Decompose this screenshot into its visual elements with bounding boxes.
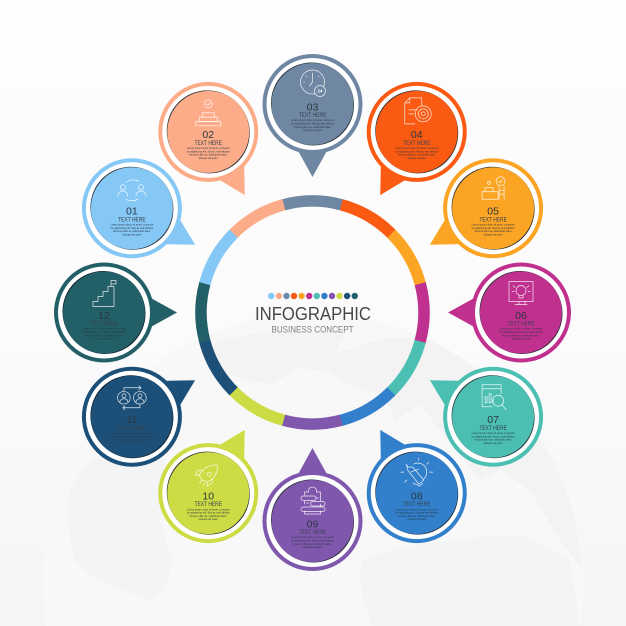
callout 01: rhoncus diam at, sollicitudin diam. — [113, 229, 151, 233]
callout 05: Lorem ipsum dolor sit amet, consecte — [472, 222, 515, 226]
callout 03: tur adipiscing elit. Sed ac erat efficitur — [291, 122, 334, 126]
callout 06: Quisque elit quam — [512, 336, 531, 340]
icon: clock 24 — [300, 70, 326, 96]
callout 05: tur adipiscing elit. Sed ac erat efficitur — [472, 226, 515, 230]
callout 03: 24 — [317, 89, 323, 94]
callout 07: Quisque elit quam — [484, 441, 503, 445]
icon: monitor bulb — [509, 282, 533, 304]
callout 10: 10 — [202, 490, 214, 502]
icon: user exchange — [118, 386, 146, 410]
callout 08: Lorem ipsum dolor sit amet, consecte — [395, 507, 438, 511]
callout 12: Quisque elit quam — [94, 336, 114, 340]
callout 12: Lorem ipsum dolor sit amet, consecte — [82, 327, 126, 331]
callout 10: TEXT HERE — [194, 501, 222, 508]
icon: desk and ladder — [482, 177, 505, 199]
callout 01: Quisque elit quam — [122, 232, 142, 236]
callout 11: 11 — [126, 414, 138, 426]
callout 08: rhoncus diam at, sollicitudin diam. — [398, 514, 436, 518]
callout 05: 05 — [487, 206, 499, 218]
callout 11 — [73, 358, 203, 475]
callout 01: Lorem ipsum dolor sit amet, consecte — [110, 222, 154, 226]
callout 02 — [150, 73, 267, 203]
callout 08: tur adipiscing elit. Sed ac erat efficitur — [395, 511, 438, 515]
callout 02: 02 — [202, 129, 214, 141]
callout 06: TEXT HERE — [507, 320, 535, 328]
callout 07: tur adipiscing elit. Sed ac erat efficitur — [472, 434, 515, 438]
callout 10: rhoncus diam at, sollicitudin diam. — [189, 514, 227, 518]
callout 04: Lorem ipsum dolor sit amet, consecte — [395, 146, 438, 150]
icon: chart magnifier — [482, 385, 506, 410]
callout 02: Quisque elit quam — [199, 156, 218, 160]
callout 03: Quisque elit quam — [303, 128, 322, 132]
callout 02: rhoncus diam at, sollicitudin diam. — [189, 153, 227, 157]
callout 07 — [422, 358, 552, 475]
callout 09: Lorem ipsum dolor sit amet, consecte — [291, 535, 334, 539]
icon: pyramid — [196, 100, 221, 126]
callout 09 — [254, 448, 371, 580]
callout 07: 07 — [487, 414, 499, 426]
callout 04: Quisque elit quam — [407, 156, 427, 160]
callout 03: TEXT HERE — [299, 112, 327, 119]
callout 10 — [150, 422, 267, 552]
title: INFOGRAPHIC — [255, 303, 371, 324]
callout 03: rhoncus diam at, sollicitudin diam. — [294, 125, 332, 129]
callout 11: tur adipiscing elit. Sed ac erat efficitur — [110, 434, 153, 438]
callout 04: rhoncus diam at, sollicitudin diam. — [398, 153, 436, 157]
callout 09: Quisque elit quam — [303, 545, 322, 549]
callout 12: tur adipiscing elit. Sed ac erat efficitur — [82, 330, 126, 334]
callout 09: 09 — [307, 518, 318, 530]
callout 07: TEXT HERE — [479, 425, 507, 432]
callout 12: 12 — [98, 310, 110, 322]
icon: rocket — [195, 465, 217, 486]
icon: stairs flag — [93, 280, 116, 306]
callout 01: TEXT HERE — [118, 216, 146, 223]
callout 01: tur adipiscing elit. Sed ac erat efficitur — [110, 226, 153, 230]
callout 04: tur adipiscing elit. Sed ac erat efficitur — [395, 149, 438, 153]
colour dots row — [268, 293, 358, 299]
icon: document target — [405, 98, 431, 124]
callout 04: TEXT HERE — [403, 140, 431, 147]
callout 04: 04 — [411, 129, 423, 141]
callout 11: TEXT HERE — [118, 425, 146, 432]
callout 02: Lorem ipsum dolor sit amet, consecte — [187, 146, 230, 150]
callout 01 — [73, 150, 203, 267]
icon: pencil and bulb — [401, 458, 433, 486]
callout 08 — [358, 422, 475, 552]
world globe backdrop — [43, 313, 583, 626]
callout 11: rhoncus diam at, sollicitudin diam. — [113, 438, 151, 442]
callout 06: rhoncus diam at, sollicitudin diam. — [502, 333, 540, 337]
callout 11: Lorem ipsum dolor sit amet, consecte — [110, 431, 154, 435]
callout 12 — [45, 254, 177, 371]
callout 10: Lorem ipsum dolor sit amet, consecte — [187, 507, 230, 511]
callout 08: Quisque elit quam — [407, 517, 427, 521]
callout 12: rhoncus diam at, sollicitudin diam. — [85, 333, 123, 337]
callout 02: tur adipiscing elit. Sed ac erat efficitur — [187, 149, 230, 153]
callout 06: 06 — [515, 310, 527, 322]
central segmented ring — [155, 155, 470, 470]
callout 02: TEXT HERE — [194, 140, 222, 147]
icon: people exchange — [118, 180, 146, 201]
callout 03 — [254, 45, 371, 177]
callout 08: TEXT HERE — [403, 501, 431, 508]
callout 10: tur adipiscing elit. Sed ac erat efficitur — [187, 511, 230, 515]
callout 05: Quisque elit quam — [484, 232, 503, 236]
callout 10: Quisque elit quam — [199, 517, 218, 521]
callout 09: rhoncus diam at, sollicitudin diam. — [294, 542, 332, 546]
callout 05: TEXT HERE — [479, 216, 507, 223]
callout 05: rhoncus diam at, sollicitudin diam. — [474, 229, 512, 233]
callout 11: Quisque elit quam — [122, 441, 142, 445]
icon: clipboard tasks — [301, 487, 325, 514]
callout 08: 08 — [411, 490, 423, 502]
callout 09: TEXT HERE — [299, 529, 327, 536]
callout 04 — [358, 73, 475, 203]
subtitle: BUSINESS CONCEPT — [272, 325, 354, 336]
callout 03: Lorem ipsum dolor sit amet, consecte — [291, 118, 334, 122]
callout 07: rhoncus diam at, sollicitudin diam. — [474, 438, 512, 442]
callout 09: tur adipiscing elit. Sed ac erat efficitur — [291, 538, 334, 542]
callout 06: Lorem ipsum dolor sit amet, consecte — [500, 327, 543, 331]
callout 12: TEXT HERE — [90, 320, 118, 328]
callout 01: 01 — [126, 206, 138, 218]
callout 03: 03 — [307, 101, 318, 113]
callout 07: Lorem ipsum dolor sit amet, consecte — [472, 431, 515, 435]
callout 05 — [422, 150, 552, 267]
callout 06 — [448, 254, 580, 371]
callout 06: tur adipiscing elit. Sed ac erat efficitur — [500, 330, 542, 334]
